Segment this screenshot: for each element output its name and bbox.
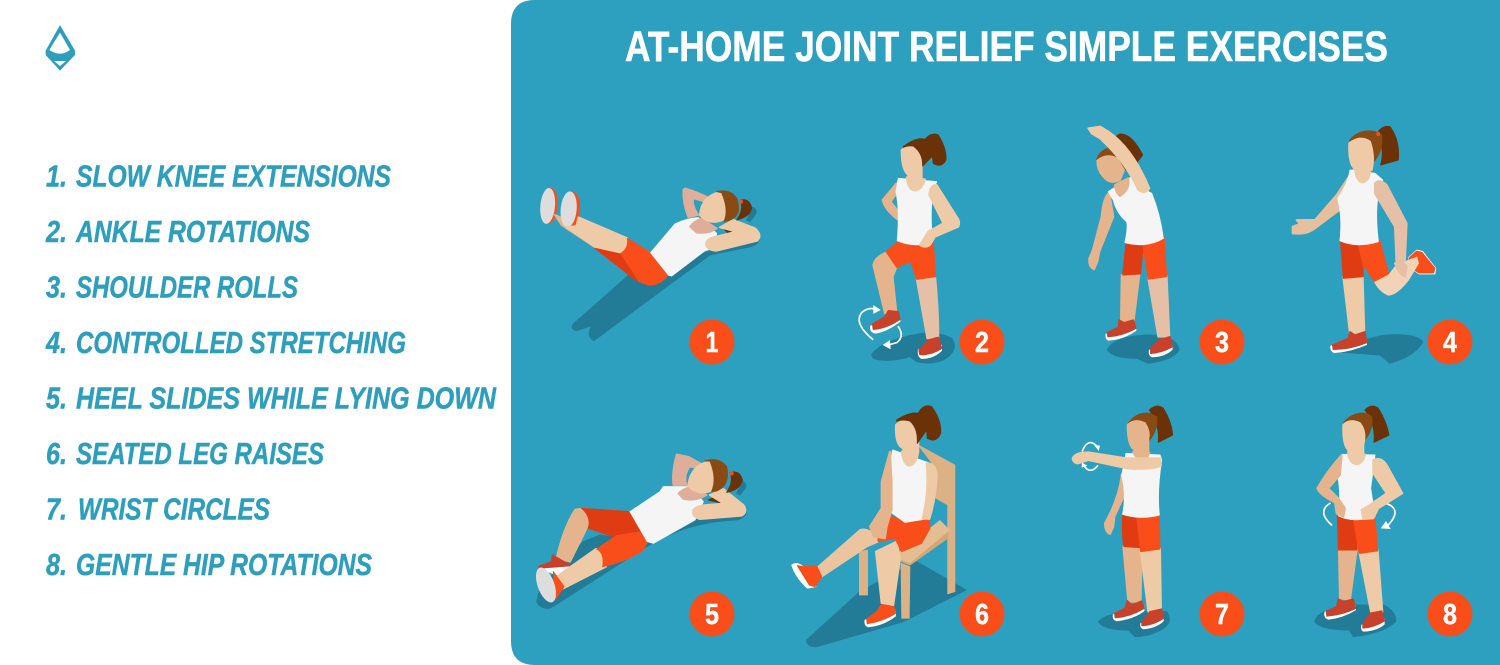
list item 3: 3. — [46, 270, 67, 304]
badge 3: 3 — [1215, 327, 1229, 359]
list item 4: 4. — [45, 325, 67, 360]
badge 1 — [690, 320, 734, 364]
figure 3: side stretch — [1088, 127, 1179, 363]
figure 4: standing quad stretch — [1293, 126, 1436, 363]
arrow: ankle rotation top — [859, 305, 881, 339]
figure 6: seated leg raise on chair — [792, 406, 966, 647]
figure 8: hip rotations — [1315, 406, 1402, 637]
figure 5: heel slide lying down — [532, 454, 746, 608]
list item 2: ANKLE ROTATIONS — [75, 214, 310, 249]
list item 7 — [46, 492, 270, 526]
list item 5: 5. — [46, 380, 67, 416]
arrow: ankle rotation bottom — [883, 327, 901, 349]
arrow: wrist circle bottom — [1082, 463, 1098, 470]
chair — [859, 445, 955, 618]
figure 1: lying leg raise — [539, 187, 759, 341]
exercise list — [45, 158, 496, 582]
badge 6 — [960, 592, 1004, 636]
arrow: hip rotation left — [1324, 503, 1332, 525]
badge 4: 4 — [1443, 327, 1457, 359]
list item 7: 7. — [46, 492, 67, 526]
badge 5 — [690, 592, 734, 636]
arrow: wrist circle top — [1082, 443, 1100, 451]
badge 7 — [1200, 592, 1244, 636]
panel: exercises background — [511, 0, 1500, 665]
list item 8: 8. — [46, 547, 67, 582]
badge 8: 8 — [1443, 599, 1457, 631]
badge 4 — [1428, 320, 1472, 364]
figure 7: wrist circles — [1073, 406, 1173, 637]
icon: logo — [46, 25, 75, 71]
badge 6: 6 — [975, 599, 989, 631]
figure 2: ankle rotations — [859, 134, 959, 363]
badge 5: 5 — [705, 599, 719, 631]
badge 2: 2 — [975, 327, 989, 359]
list item 6: SEATED LEG RAISES — [76, 436, 324, 471]
list item 5: HEEL SLIDES WHILE LYING DOWN — [76, 380, 496, 416]
badge 1: 1 — [706, 327, 718, 359]
list item 1: SLOW KNEE EXTENSIONS — [76, 158, 391, 194]
list item 6: 6. — [46, 436, 67, 471]
list item 3: SHOULDER ROLLS — [76, 270, 298, 304]
list item 2: 2. — [45, 214, 67, 249]
badge 7: 7 — [1215, 599, 1229, 631]
list item 3 — [46, 270, 298, 304]
list item 1: 1. — [46, 158, 67, 194]
list item 4: CONTROLLED STRETCHING — [76, 325, 406, 360]
badge 3 — [1200, 320, 1244, 364]
arrow: hip rotation right — [1375, 501, 1395, 529]
badge 2 — [960, 320, 1004, 364]
list item 8: GENTLE HIP ROTATIONS — [76, 547, 372, 582]
list item 7: WRIST CIRCLES — [78, 492, 270, 526]
badge 8 — [1428, 592, 1472, 636]
